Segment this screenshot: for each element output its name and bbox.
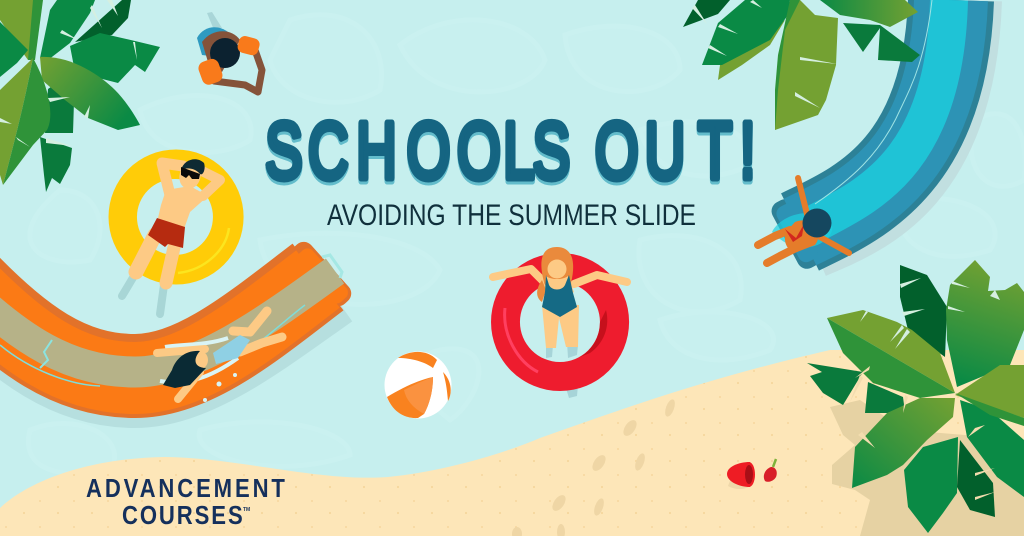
logo: advancement courses: ADVANCEMENT [86,474,285,503]
title: schools out: SCHOOLS OUT! [265,105,755,195]
subtitle: AVOIDING THE SUMMER SLIDE [327,199,696,232]
man on yellow ring [109,149,244,314]
palm tree: top left [0,0,160,192]
orange water slide [0,238,355,386]
footprints in the sand [512,398,677,536]
red bucket and spade [727,459,777,489]
kid with armbands [196,12,262,92]
girl sliding on orange slide [157,311,282,402]
logo: advancement courses [86,474,285,530]
logo: advancement courses: COURSES [122,501,243,530]
palm tree: top right [683,0,920,130]
blue water slide [768,0,961,272]
palm shadow on the sand [830,400,1024,536]
logo: advancement courses: TM [243,507,250,513]
woman on red ring [491,247,629,398]
palm tree: bottom right [807,260,1024,533]
title: schools out: SCHOOLS OUT! [265,108,755,198]
girl sliding on blue slide [758,178,849,263]
beach ball [384,352,452,418]
beach sand [0,350,1024,536]
